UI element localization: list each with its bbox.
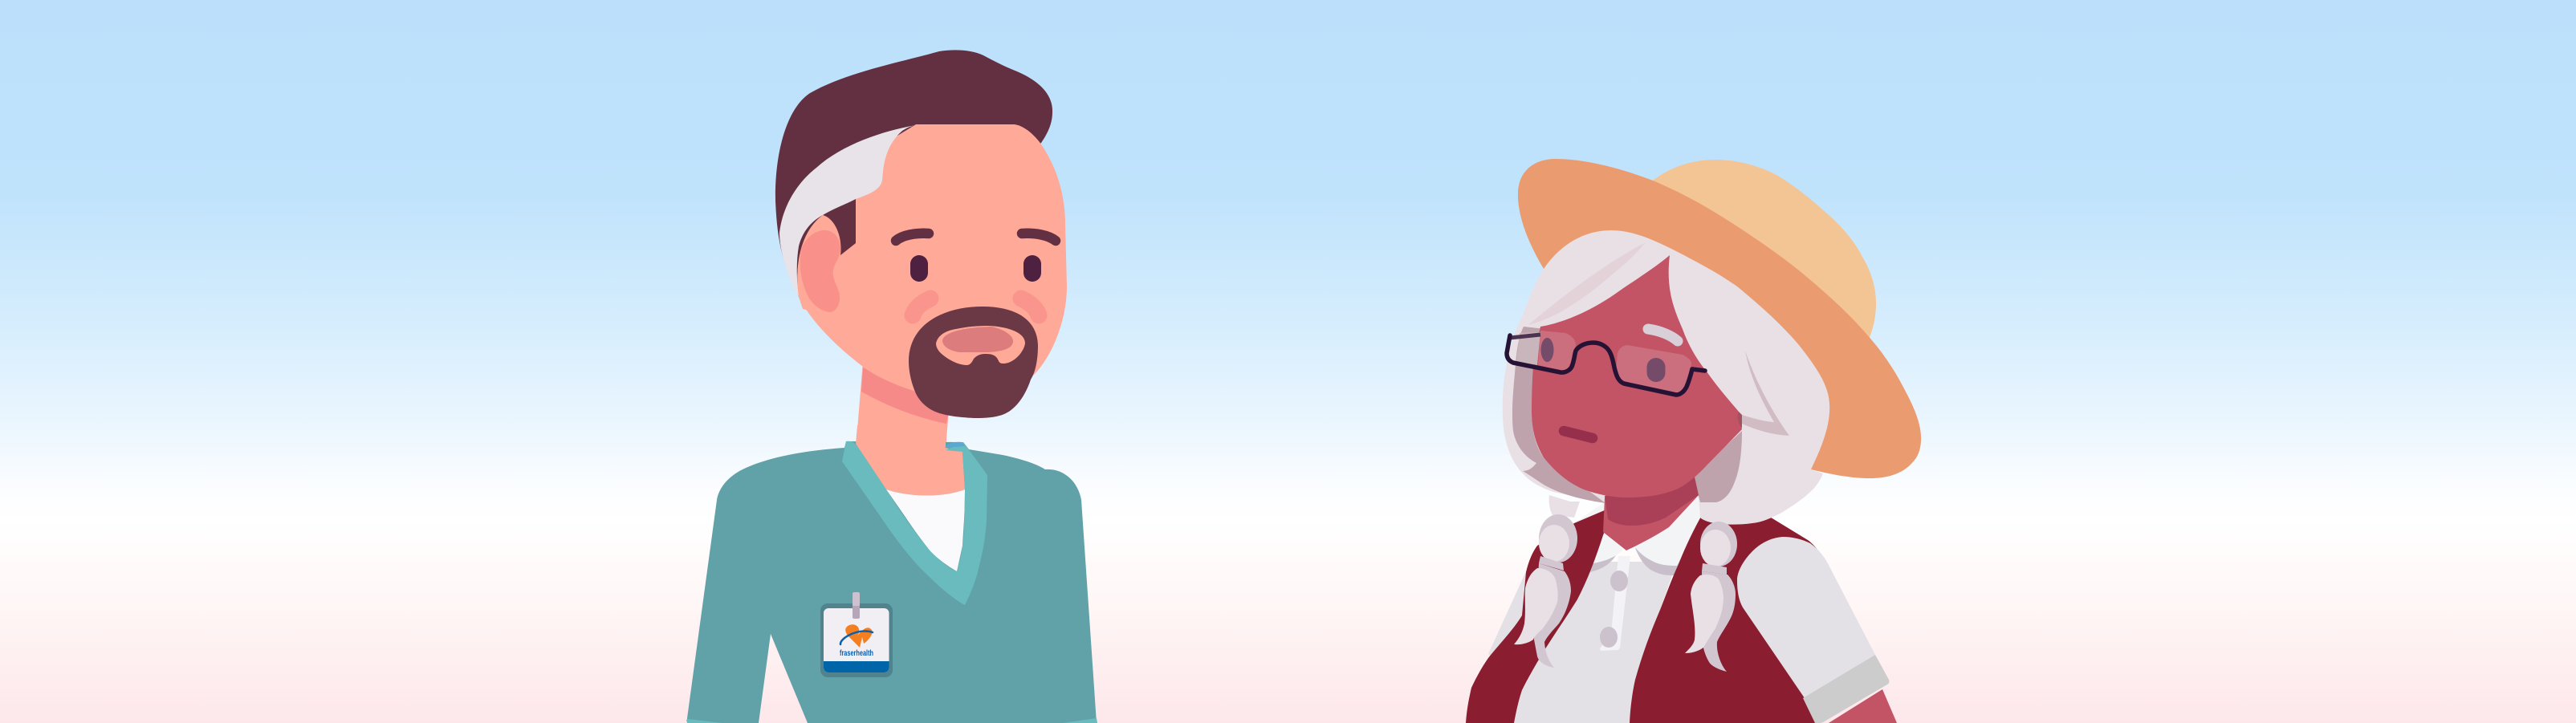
right lens [1616, 345, 1691, 393]
neck shadow [861, 368, 948, 424]
blue collar cap [945, 442, 966, 448]
logo wordmark: fraserhealth [840, 648, 873, 658]
vest [1466, 510, 1846, 723]
right sleeve [1737, 537, 1875, 698]
woman face [1532, 255, 1742, 498]
left eye [910, 255, 928, 282]
name badge [820, 592, 893, 677]
right eye [1647, 358, 1665, 382]
mouth opening [936, 326, 1025, 365]
skin at neckline [856, 425, 965, 496]
left braid tail shadow [1534, 563, 1571, 668]
left braid upper bead [1539, 525, 1569, 562]
right braid tail shadow [1702, 571, 1736, 672]
right braid [1685, 522, 1737, 672]
logo heart [845, 624, 873, 648]
hair back mass [1503, 230, 1829, 525]
inner ear [800, 230, 840, 312]
right hair shadow [1693, 431, 1742, 502]
left cheek [913, 299, 930, 315]
left braid tail [1514, 568, 1558, 644]
shirt button bottom [1600, 627, 1618, 648]
man character [686, 50, 1097, 723]
left eyebrow [896, 234, 929, 241]
glasses frame [1507, 335, 1705, 395]
white hair band at temple [779, 125, 916, 297]
left lens on hair [1516, 332, 1540, 365]
shirt torso [1514, 562, 1677, 723]
badge card [824, 608, 889, 672]
woman chest [1603, 495, 1699, 550]
woman eyebrow [1648, 329, 1678, 341]
left braid [1514, 495, 1580, 668]
woman neck [1605, 473, 1699, 526]
man hair [775, 50, 1052, 297]
white undershirt [886, 489, 965, 571]
left braid top [1549, 495, 1580, 518]
lips [942, 327, 1013, 352]
left braid tie [1539, 556, 1564, 571]
scrubs V collar [842, 441, 987, 605]
left hair shadow [1512, 327, 1605, 503]
right braid tie [1702, 563, 1727, 575]
left eye [1541, 338, 1554, 362]
right cheek [1021, 299, 1039, 315]
right sleeve cuff [1063, 718, 1097, 723]
woman character [1466, 159, 1921, 723]
hair streak shadow [1742, 351, 1789, 436]
ear peek [1738, 412, 1742, 428]
badge clip [853, 592, 860, 619]
left sleeve [1488, 571, 1529, 658]
badge holder [820, 603, 893, 677]
man neck [844, 361, 965, 496]
right eye [1023, 255, 1041, 282]
hat crown [1653, 160, 1876, 345]
shirt button top [1610, 571, 1628, 591]
right braid upper bead shadow [1700, 522, 1737, 567]
right braid upper bead [1700, 530, 1731, 567]
right eyebrow [1022, 234, 1056, 241]
woman mouth [1564, 431, 1593, 438]
left braid upper bead shadow [1539, 514, 1577, 563]
ear [797, 215, 841, 317]
badge blue strip [824, 661, 889, 672]
glasses temple left [1510, 335, 1540, 338]
shirt placket [1600, 556, 1630, 651]
collar shadow [1588, 546, 1682, 575]
left lens [1538, 331, 1576, 372]
shirt collar right [1626, 495, 1703, 566]
beard [909, 307, 1038, 418]
right braid tail [1685, 575, 1723, 653]
shirt collar left [1574, 502, 1623, 563]
left forearm [1829, 689, 1897, 723]
left sleeve cuff [686, 719, 722, 723]
bang streak [1528, 242, 1646, 325]
hat brim [1518, 159, 1921, 478]
logo swoosh [840, 631, 873, 644]
sleeve cuff [1803, 655, 1889, 723]
scrubs top [687, 441, 1097, 723]
man face [797, 124, 1067, 417]
sideburn [819, 197, 856, 255]
